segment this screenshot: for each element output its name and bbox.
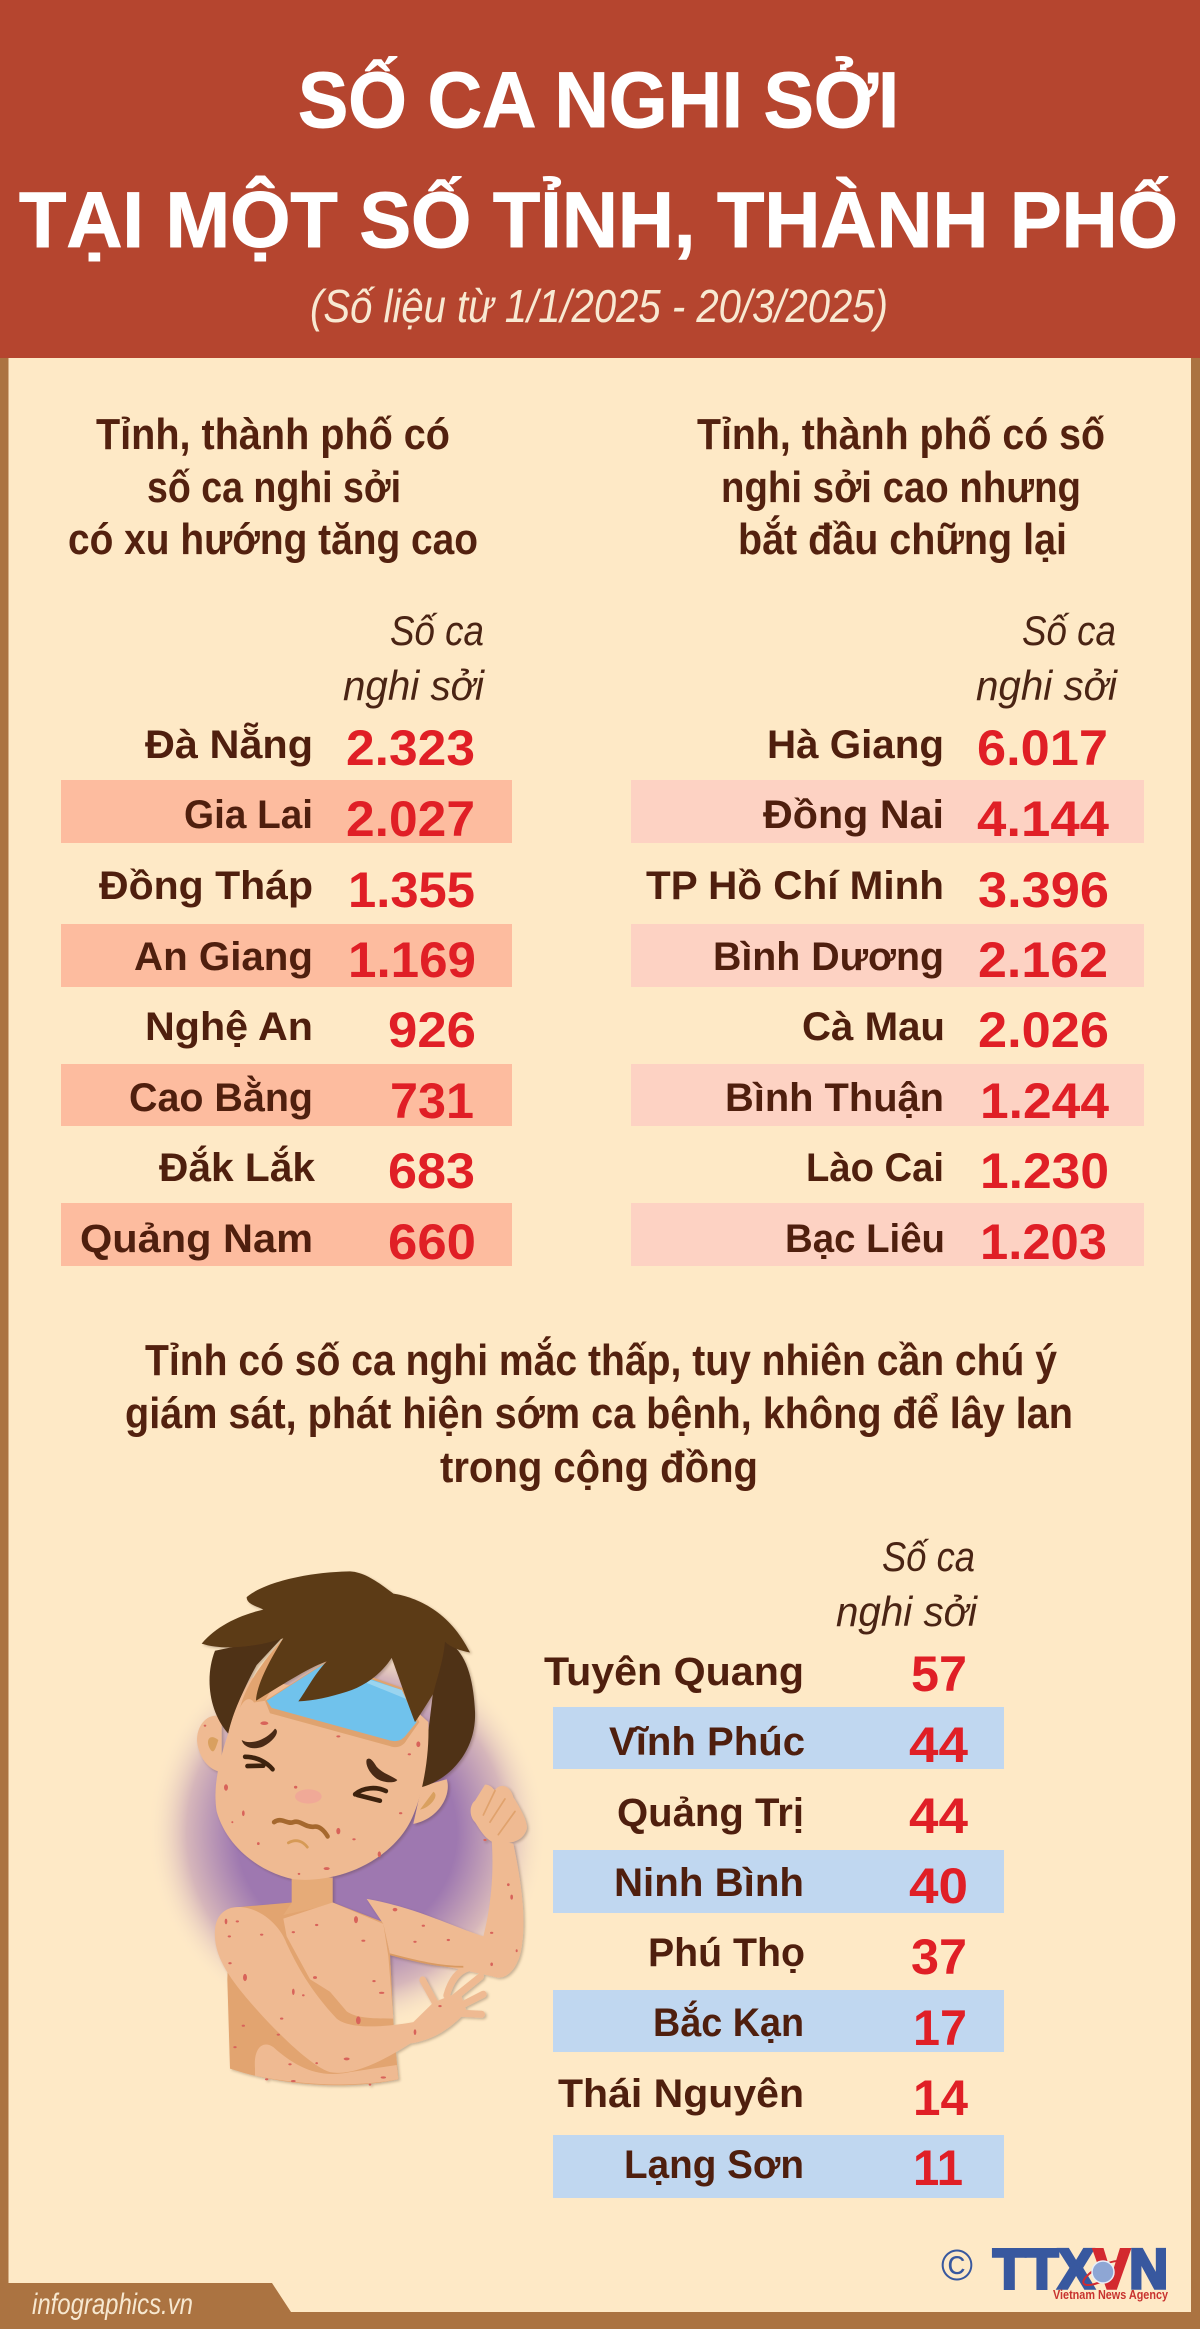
- neck: [283, 1877, 333, 1915]
- eyebrows: [242, 1729, 397, 1782]
- row: Vĩnh Phúc: Vĩnh Phúc: [609, 1720, 805, 1764]
- row: Gia Lai: 2.027: [346, 791, 475, 847]
- row: Đà Nẵng: 2.323: [346, 720, 475, 776]
- title: TẠI MỘT SỐ TỈNH, THÀNH PHỐ: [19, 175, 1178, 264]
- row: Bạc Liêu: [785, 1214, 1107, 1270]
- lower lip: [288, 1841, 307, 1847]
- row: Cà Mau: 2.026: [978, 1002, 1109, 1058]
- footer tab: [0, 2283, 291, 2321]
- row: Đắk Lắk: Đắk Lắk: [159, 1144, 316, 1190]
- row: Bạc Liêu: Bạc Liêu: [785, 1217, 945, 1261]
- row: An Giang: An Giang: [134, 935, 313, 979]
- wavy mouth: [274, 1820, 328, 1836]
- heading: left column: [68, 410, 478, 564]
- row: Lào Cai: Lào Cai: [806, 1146, 944, 1190]
- column header: Số ca: [1022, 607, 1116, 654]
- globe: [1092, 2261, 1114, 2283]
- row bands: [631, 780, 1144, 1266]
- row: Đồng Tháp: 1.355: [348, 862, 475, 918]
- under arm crease: [390, 1954, 463, 1967]
- right ear: [413, 1779, 448, 1824]
- table: high but slowing provinces: [631, 607, 1144, 1270]
- row: Quảng Nam: Quảng Nam: [80, 1217, 313, 1261]
- heading: left column: số ca nghi sởi: [147, 463, 401, 512]
- lower torso: [255, 2044, 398, 2084]
- row: An Giang: 1.169: [348, 932, 476, 988]
- row: TP Hồ Chí Minh: [646, 862, 1109, 918]
- illustration: sick boy with measles rash: [147, 1571, 547, 2086]
- footer tab: infographics.vn: [32, 2288, 193, 2321]
- column header: nghi sởi: [343, 662, 486, 709]
- row: Bình Dương: Bình Dương: [713, 935, 944, 979]
- row: Bắc Kạn: 17: [913, 2000, 967, 2056]
- hair top: [202, 1571, 470, 1722]
- row: Ninh Bình: [614, 1858, 968, 1914]
- back hair right: [422, 1640, 475, 1787]
- row: Đồng Nai: Đồng Nai: [763, 793, 944, 837]
- row: Ninh Bình: 40: [909, 1858, 968, 1914]
- row: Tuyên Quang: 57: [911, 1646, 967, 1702]
- title: SỐ CA NGHI SỞI: [298, 55, 899, 144]
- row: Quảng Nam: 660: [388, 1214, 476, 1270]
- heading: low case provinces: Tỉnh có số ca nghi mắc thấp, tuy nhiên cần chú ý: [145, 1335, 1057, 1385]
- row: Cao Bằng: Cao Bằng: [129, 1074, 313, 1120]
- row: Lạng Sơn: Lạng Sơn: [624, 2143, 804, 2187]
- row: Phú Thọ: Phú Thọ: [648, 1931, 805, 1975]
- face: [215, 1677, 429, 1880]
- row bands: [553, 1707, 1004, 2198]
- row: Cà Mau: Cà Mau: [802, 1005, 945, 1049]
- row: Bắc Kạn: Bắc Kạn: [653, 1999, 804, 2045]
- cold pack edge: [265, 1661, 419, 1747]
- row: Tuyên Quang: Tuyên Quang: [544, 1650, 804, 1694]
- row: Đồng Tháp: [99, 862, 475, 918]
- row: Cà Mau: [802, 1002, 1109, 1058]
- subtitle: date range: (Số liệu từ 1/1/2025 - 20/3/2025): [310, 280, 888, 332]
- row: Quảng Trị: 44: [909, 1788, 968, 1844]
- row: Bình Dương: 2.162: [978, 932, 1108, 988]
- row: Lạng Sơn: 11: [913, 2140, 963, 2196]
- cold pack: [267, 1663, 417, 1741]
- row: Thái Nguyên: 14: [913, 2070, 968, 2126]
- row: Lào Cai: 1.230: [980, 1143, 1109, 1199]
- row: Cao Bằng: [129, 1073, 474, 1129]
- column header: nghi sởi: [836, 1588, 979, 1635]
- row bands: [61, 780, 512, 1266]
- back hair left: [210, 1636, 283, 1734]
- row: Hà Giang: Hà Giang: [767, 723, 944, 767]
- purple glow: [147, 1633, 547, 2033]
- row: TP Hồ Chí Minh: TP Hồ Chí Minh: [646, 864, 944, 908]
- title: [19, 55, 1178, 264]
- heading: right column: bắt đầu chững lại: [738, 514, 1067, 564]
- row: Đồng Nai: 4.144: [977, 791, 1109, 847]
- rash spots: [204, 1721, 518, 2086]
- row: Hà Giang: [767, 720, 1108, 776]
- row: Đà Nẵng: Đà Nẵng: [145, 721, 313, 767]
- row: Cao Bằng: 731: [390, 1073, 474, 1129]
- heading: low case provinces: [125, 1335, 1073, 1492]
- row: Quảng Trị: [617, 1788, 968, 1844]
- cold pack highlight: [367, 1679, 406, 1699]
- column header: Số ca: [390, 607, 484, 654]
- heading: left column: Tỉnh, thành phố có: [96, 410, 450, 459]
- row: Bắc Kạn: [653, 1999, 967, 2056]
- closed eyes: [245, 1757, 386, 1801]
- column header: nghi sởi: [976, 662, 1119, 709]
- row: Tuyên Quang: [544, 1646, 967, 1702]
- heading: right column: Tỉnh, thành phố có số: [697, 410, 1105, 459]
- logo: TTXVN: Vietnam News Agency: [1053, 2287, 1169, 2302]
- copyright mark: ©: [941, 2241, 973, 2290]
- row: Vĩnh Phúc: 44: [909, 1717, 968, 1773]
- heading: right column: nghi sởi cao nhưng: [721, 463, 1081, 512]
- row: TP Hồ Chí Minh: 3.396: [978, 862, 1109, 918]
- column header: Số ca: [882, 1533, 975, 1580]
- row: Phú Thọ: [648, 1929, 967, 1985]
- row: Đà Nẵng: [145, 720, 475, 776]
- heading: low case provinces: trong cộng đồng: [440, 1443, 758, 1492]
- row: Thái Nguyên: Thái Nguyên: [558, 2072, 804, 2116]
- fist: [471, 1785, 527, 1844]
- row: Bình Thuận: [725, 1073, 1109, 1129]
- near arm: [215, 1907, 467, 2073]
- nose: [295, 1789, 322, 1804]
- row: Nghệ An: Nghệ An: [145, 1005, 313, 1049]
- column header: [976, 607, 1119, 709]
- fingers: [423, 1968, 483, 2014]
- table: rising provinces: [61, 607, 512, 1270]
- row: Vĩnh Phúc: [609, 1717, 968, 1773]
- forehead shade: [240, 1638, 283, 1708]
- header band: [0, 0, 1200, 358]
- row: Lào Cai: [806, 1143, 1109, 1199]
- row: Ninh Bình: Ninh Bình: [614, 1861, 804, 1905]
- column header: [343, 607, 486, 709]
- torso shade: [227, 1902, 398, 2085]
- row: Bình Thuận: 1.244: [980, 1073, 1109, 1129]
- column header: [836, 1533, 979, 1635]
- row: Bình Dương: [713, 932, 1108, 988]
- table: low case provinces: [544, 1533, 1004, 2198]
- row: Bạc Liêu: 1.203: [980, 1214, 1107, 1270]
- row: Gia Lai: [184, 791, 475, 847]
- row: Nghệ An: [145, 1002, 476, 1058]
- row: Đồng Tháp: Đồng Tháp: [99, 864, 313, 908]
- orbit: [1080, 2256, 1126, 2290]
- row: Gia Lai: Gia Lai: [184, 793, 313, 837]
- row: Bình Thuận: Bình Thuận: [725, 1076, 944, 1120]
- row: Quảng Trị: Quảng Trị: [617, 1791, 804, 1835]
- heading: right column: [697, 410, 1105, 564]
- row: An Giang: [134, 932, 476, 988]
- heading: low case provinces: giám sát, phát hiện sớm ca bệnh, không để lây lan: [125, 1389, 1073, 1438]
- left ear: [197, 1716, 222, 1772]
- row: Thái Nguyên: [558, 2070, 968, 2126]
- figure: [197, 1571, 527, 2086]
- raised arm: [367, 1840, 523, 1978]
- row: Phú Thọ: 37: [911, 1929, 967, 1985]
- logo: TTXVN: TTXVN: [993, 2237, 1168, 2300]
- row: Hà Giang: 6.017: [977, 720, 1108, 776]
- row: Lạng Sơn: [624, 2140, 963, 2196]
- heading: left column: có xu hướng tăng cao: [68, 515, 478, 564]
- row: Đồng Nai: [763, 791, 1109, 847]
- row: Đắk Lắk: 683: [388, 1143, 475, 1199]
- row: Đắk Lắk: [159, 1143, 475, 1199]
- row: Quảng Nam: [80, 1214, 476, 1270]
- chest: [283, 1902, 393, 2019]
- row: Nghệ An: 926: [388, 1002, 476, 1058]
